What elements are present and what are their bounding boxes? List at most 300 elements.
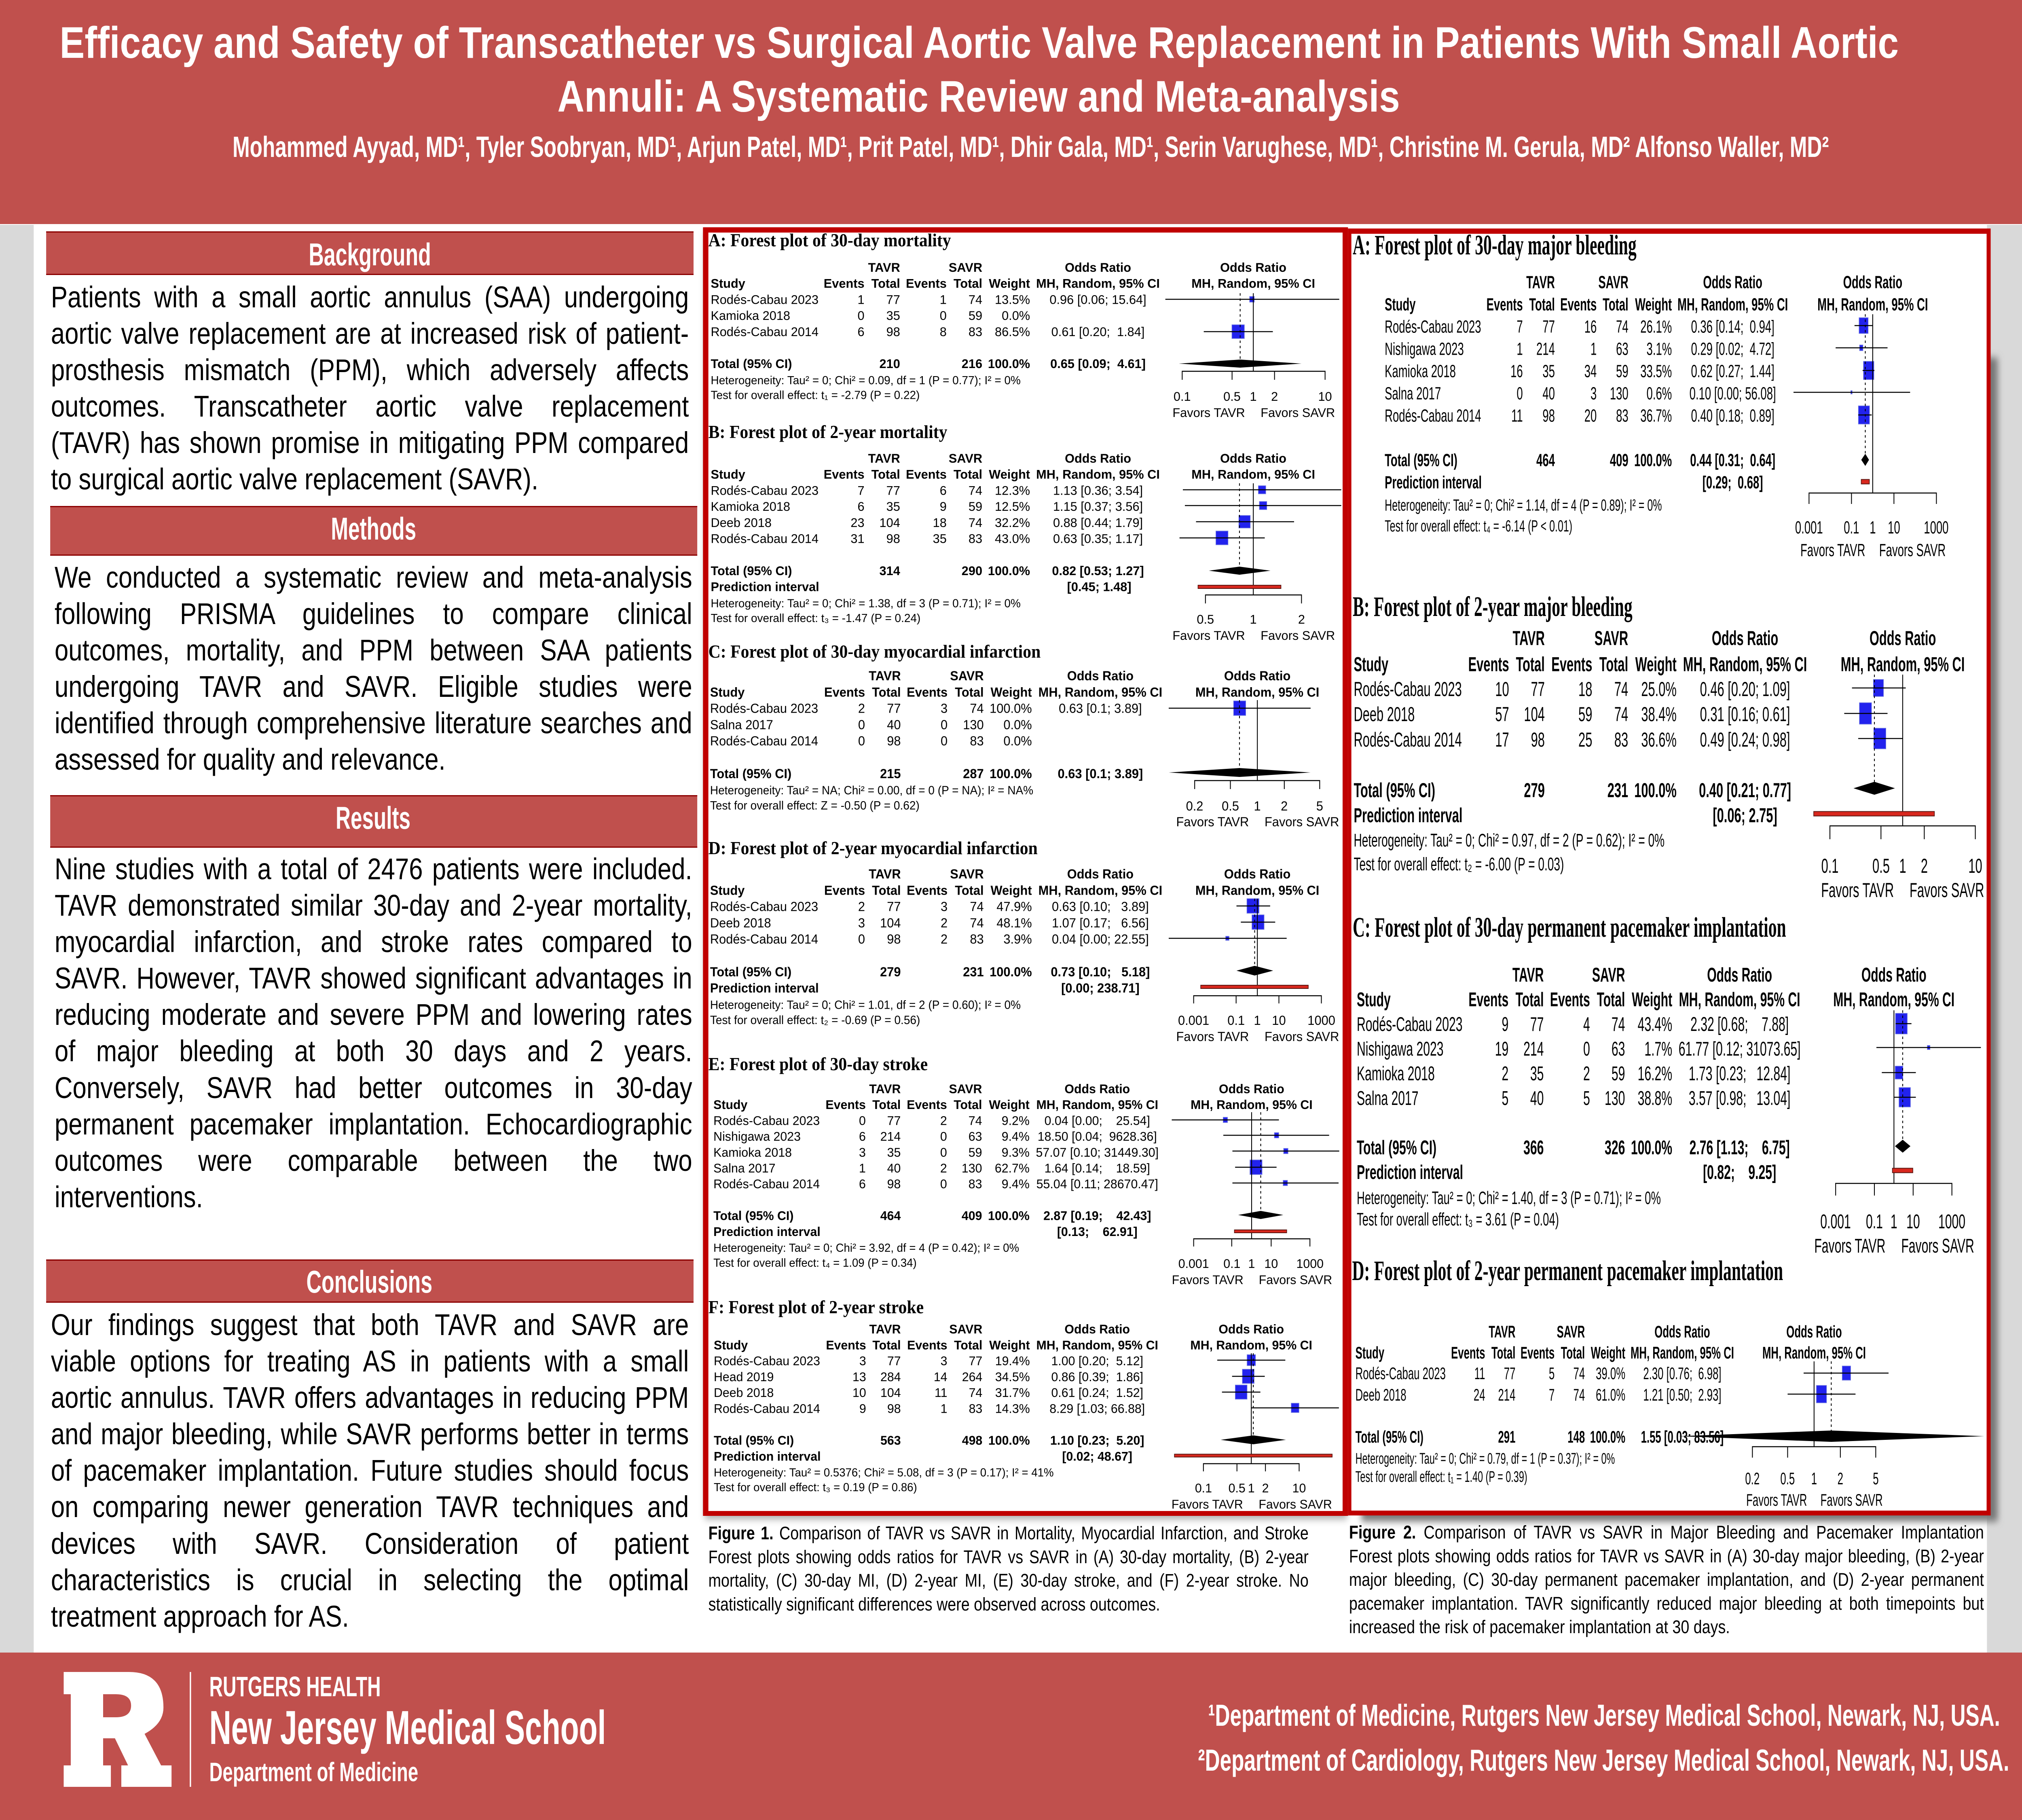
study table: MH, Random, 95% CI [1677,294,1788,314]
study table: 104 [880,515,900,530]
study table: Rodés-Cabau 2014 [710,734,818,748]
study table: 36.7% [1640,406,1672,425]
study table: 13 [852,1369,866,1384]
study table: 2 [940,1161,947,1175]
study table: 35 [886,309,900,323]
study table: Odds Ratio [1712,627,1778,650]
study table: 77 [887,899,901,914]
study table: MH, Random, 95% CI [1191,276,1315,291]
forest plot 2C: 30-day permanent pacemaker implantation [1353,912,1981,1257]
study table: Kamioka 2018 [711,309,790,323]
study table: 74 [969,483,982,498]
study table: 0.0% [1003,734,1032,748]
study table: 2 [1921,855,1928,877]
study table: 25.0% [1641,678,1677,700]
study table: 77 [1504,1365,1515,1383]
study table: Kamioka 2018 [713,1145,792,1160]
study table: Rodés-Cabau 2014 [711,324,819,339]
logo wordmark: Department of Medicine [209,1757,418,1787]
study table: 74 [970,899,984,914]
study table: 0 [1516,383,1523,403]
study table: 31.7% [995,1386,1030,1400]
forest graphic [1678,1361,1984,1458]
study table: MH, Random, 95% CI [1762,1344,1866,1363]
study table: MH, Random, 95% CI [1036,276,1160,291]
study table: Rodés-Cabau 2023 [1385,317,1481,336]
study table: Total [955,685,984,699]
study table: Favors TAVR [1172,1497,1243,1511]
forest graphic [1172,1112,1339,1246]
study table: Rodés-Cabau 2023 [1354,678,1462,700]
study table: 2.87 [0.19; 42.43] [1043,1208,1151,1223]
heading: Conclusions: Conclusions [307,1264,432,1299]
study table: 2 [1262,1481,1269,1495]
study table: 214 [1523,1037,1544,1060]
study table: Rodés-Cabau 2023 [710,701,818,716]
study table: 0.5 [1223,389,1241,404]
study table: Heterogeneity: Tau² = 0; Chi² = 0.79, df = 1 (P = 0.37); I² = 0% [1356,1450,1615,1467]
plot title: B: Forest plot of 2-year major bleeding [1353,591,1633,622]
study table: Total (95% CI) [1385,450,1457,470]
study table: 1 [1591,339,1597,359]
study table: 2.76 [1.13; 6.75] [1690,1136,1790,1159]
study table: 0 [940,1177,947,1191]
text block: conclusions: treatment approach for AS. [51,1600,349,1633]
study table: Total [1529,294,1555,314]
study table: 2 [858,701,865,716]
study table: Events [1487,294,1523,314]
logo wordmark [209,1671,606,1787]
study table: 36.6% [1641,729,1677,751]
study table: 4 [1583,1013,1590,1035]
study table: 0.63 [0.1; 3.89] [1058,766,1143,781]
study table: 83 [969,1401,982,1416]
study table: Weight [989,1338,1030,1352]
study table: 326 [1605,1136,1625,1159]
study table: 59 [969,1145,982,1160]
study table: Weight [1635,294,1672,314]
study table: Test for overall effect: t₂ = -0.69 (P = 0.56) [710,1014,920,1027]
caption: figure 1: Figure 1. Comparison of TAVR vs SAVR in Mortality, Myocardial Infarction, and Stroke [709,1523,1309,1543]
study table: Odds Ratio [1220,260,1286,275]
study table: 0.36 [0.14; 0.94] [1691,317,1775,336]
study table: 1 [859,1161,866,1175]
study table: Total (95% CI) [711,357,792,371]
study table: 1 [1870,517,1876,537]
study table: Weight [1591,1344,1625,1363]
study table: Total (95% CI) [711,563,792,578]
study table: 210 [880,357,900,371]
study table: Events [906,467,947,482]
study table: 77 [887,1354,901,1368]
study table: 14 [934,1369,948,1384]
study table: 26.1% [1640,317,1672,336]
study table: Test for overall effect: t₃ = 3.61 (P = 0.04) [1357,1209,1559,1230]
study table: Deeb 2018 [711,515,772,530]
plot title: D: Forest plot of 2-year permanent pacemaker implantation [1352,1255,1783,1286]
study table: 77 [886,483,900,498]
study table: 100.0% [990,964,1032,979]
study table: 130 [962,1161,982,1175]
text block: results [55,851,692,1215]
study table [713,1082,1332,1287]
study table: [0.13; 62.91] [1057,1224,1138,1239]
study table: SAVR [950,866,984,881]
study table: 100.0% [1631,1136,1672,1159]
study table: Events [1560,294,1597,314]
text block: methods: identified through comprehensive literature searches and [55,706,692,740]
study table: 214 [1536,339,1555,359]
study table: Study [710,883,745,897]
study table: SAVR [1598,272,1629,292]
study table: 9.3% [1002,1145,1030,1160]
study table: Rodés-Cabau 2014 [710,932,818,946]
study table: Heterogeneity: Tau² = 0; Chi² = 1.01, df = 2 (P = 0.60); I² = 0% [710,999,1021,1012]
study table: Rodés-Cabau 2014 [714,1401,820,1416]
study table: 12.3% [995,483,1030,498]
study table: Odds Ratio [1843,272,1902,292]
study table [1356,1323,1883,1510]
forest graphic [1169,899,1322,1003]
study table: Odds Ratio [1218,1322,1284,1336]
study table: Test for overall effect: t₄ = 1.09 (P = 0.34) [713,1257,917,1269]
study table: 366 [1523,1136,1544,1159]
study table: Favors TAVR [1746,1491,1807,1510]
text block: background: to surgical aortic valve replacement (SAVR). [51,462,538,496]
study table: 74 [1614,678,1628,700]
study table [1357,963,1974,1257]
study table: 8 [940,324,947,339]
study table: Events [1550,988,1590,1011]
study table: Events [824,685,865,699]
study table: Odds Ratio [1220,451,1286,466]
study table: 231 [1607,779,1628,802]
study table: 0.5 [1222,798,1239,813]
study table: 1.00 [0.20; 5.12] [1051,1354,1143,1368]
study table: 98 [886,324,900,339]
study table: 86.5% [995,324,1030,339]
study table: 0.001 [1178,1013,1209,1028]
study table: Total [954,467,982,482]
study table: 10 [1968,855,1982,877]
study table: 0 [857,309,865,323]
text block: background: Patients with a small aortic annulus (SAA) undergoing [51,280,689,314]
study table: 3.1% [1647,339,1672,359]
study table: 0.2 [1745,1470,1760,1488]
study table: 1.55 [0.03; 83.56] [1641,1428,1724,1447]
study table: 98 [887,932,901,946]
forest graphic [1836,1010,1981,1196]
study table: 9 [1502,1013,1508,1035]
study table [711,451,1335,643]
study table: Total [872,883,901,897]
study table: 16 [1510,361,1523,381]
text block: background: outcomes. Transcatheter aortic valve replacement [51,389,689,423]
study table: Deeb 2018 [714,1386,774,1400]
text block: conclusions: characteristics is crucial in selecting the optimal [51,1563,689,1597]
study table: 98 [1531,729,1545,751]
study table: Odds Ratio [1067,866,1134,881]
study table: 100.0% [988,357,1030,371]
study table: MH, Random, 95% CI [1195,883,1319,897]
study table: 130 [1610,383,1629,403]
study table: 0.1 [1223,1257,1240,1271]
study table: 100.0% [988,1433,1030,1448]
study table: 1.10 [0.23; 5.20] [1050,1433,1144,1448]
study table: 7 [857,483,865,498]
plot title: C: Forest plot of 30-day myocardial infarction [709,641,1041,662]
study table: Study [714,1338,748,1352]
forest plot 2B: 2-year major bleeding [1353,591,1984,902]
study table: Total (95% CI) [714,1433,794,1448]
title: Efficacy and Safety of Transcatheter vs Surgical Aortic Valve Replacement in Patients With Small Aortic [60,18,1899,68]
study table: 7 [1549,1386,1555,1405]
study table: Odds Ratio [1861,963,1927,986]
study table: 9 [859,1401,866,1416]
text block: results: outcomes were comparable between the two [55,1144,692,1177]
forest plot 1A: 30-day mortality [709,230,1339,420]
study table: Total [955,883,984,897]
study table: [0.00; 238.71] [1061,980,1140,995]
study table: Heterogeneity: Tau² = 0; Chi² = 1.14, df = 4 (P = 0.89); I² = 0% [1385,497,1662,514]
text block: conclusions: of pacemaker implantation. Future studies should focus [51,1454,689,1487]
study table: Events [1551,653,1592,675]
study table: Total [954,1098,982,1112]
study table: 100.0% [990,766,1032,781]
study table: Kamioka 2018 [1357,1062,1435,1085]
study table: MH, Random, 95% CI [1631,1344,1734,1363]
study table: 314 [880,563,900,578]
study table: 74 [969,1386,982,1400]
text block: results: Nine studies with a total of 2476 patients were included. [55,852,692,886]
study table: 98 [887,734,901,748]
study table: 2 [940,1113,947,1128]
study table: 10 [1265,1257,1278,1271]
study table: 264 [962,1369,982,1384]
study table: 35 [933,531,947,546]
panel: figure 2 frame [1348,229,1998,1522]
study table: Study [1356,1344,1385,1363]
study table: Favors SAVR [1265,1029,1339,1044]
study table: SAVR [950,668,984,683]
study table: SAVR [1557,1323,1585,1342]
study table: 1.21 [0.50; 2.93] [1643,1386,1722,1405]
study table: Total [1603,294,1629,314]
study table: 0.1 [1844,517,1859,537]
study table: 2 [1271,389,1278,404]
plot title: A: Forest plot of 30-day major bleeding [1353,229,1637,260]
title: Annuli: A Systematic Review and Meta-analysis [557,72,1400,121]
study table: Salna 2017 [710,717,773,732]
study table: 563 [880,1433,901,1448]
study table: SAVR [1592,963,1625,986]
study table: 62.7% [995,1161,1030,1175]
study table: 10 [852,1386,866,1400]
study table: 0.001 [1795,517,1823,537]
study table: 74 [970,701,984,716]
study table: 1000 [1307,1013,1335,1028]
caption: figure 2: Forest plots showing odds ratios for TAVR vs SAVR in (A) 30-day major bleeding, (B) 2-year [1349,1546,1984,1566]
study table: Heterogeneity: Tau² = 0; Chi² = 0.09, df = 1 (P = 0.77); I² = 0% [711,374,1021,387]
study table: 83 [969,1177,982,1191]
study table: 3 [859,1354,866,1368]
study table: 0.10 [0.00; 56.08] [1690,383,1776,403]
study table: 63 [1616,339,1629,359]
study table: Study [710,685,745,699]
study table: 104 [880,1386,901,1400]
study table: 77 [969,1354,982,1368]
study table: 279 [880,964,901,979]
study table: 13.5% [995,292,1030,307]
study table: 34 [1584,361,1597,381]
forest plot 2A: 30-day major bleeding [1353,229,1948,560]
study table: Salna 2017 [713,1161,776,1175]
study table: Total (95% CI) [1354,779,1435,802]
study table: 0.31 [0.16; 0.61] [1700,703,1790,726]
study table: MH, Random, 95% CI [1841,653,1965,675]
study table: [0.82; 9.25] [1703,1161,1776,1183]
study table: 59 [969,309,982,323]
study table: TAVR [869,1082,901,1096]
study table: 83 [969,531,982,546]
study table: 57 [1495,703,1509,726]
study table: Favors SAVR [1265,814,1339,829]
study table: 100.0% [1634,450,1672,470]
study table: Test for overall effect: Z = -0.50 (P = 0.62) [710,799,920,813]
study table: 1000 [1297,1257,1324,1271]
study table: 0.63 [0.10; 3.89] [1052,899,1149,914]
study table: Weight [990,685,1032,699]
forest graphic [1165,293,1339,380]
study table: 0.5 [1229,1481,1246,1495]
study table: 130 [963,717,984,732]
study table: 59 [1612,1062,1625,1085]
study table: 1 [1891,1210,1897,1233]
study table: 3 [858,915,865,930]
study table: 59 [1578,703,1592,726]
study table: 59 [1616,361,1629,381]
study table: Total [1491,1344,1515,1363]
study table: 0.62 [0.27; 1.44] [1691,361,1775,381]
study table: Kamioka 2018 [1385,361,1456,381]
study table: 2.32 [0.68; 7.88] [1690,1013,1789,1035]
study table: 0 [940,1145,947,1160]
study table: 74 [1616,317,1629,336]
study table: Events [1451,1344,1485,1363]
study table: 0.1 [1227,1013,1245,1028]
study table: Total [1516,988,1544,1011]
study table: Prediction interval [1357,1161,1463,1183]
study table: Favors TAVR [1172,1273,1244,1287]
study table: 3 [1591,383,1597,403]
study table: 1.07 [0.17; 6.56] [1052,915,1149,930]
study table: Total [871,276,900,291]
study table: 0.1 [1195,1481,1212,1495]
study table: 0.73 [0.10; 5.18] [1051,964,1150,979]
study table: Weight [989,276,1030,291]
study table: Salna 2017 [1357,1087,1419,1109]
study table: 100.0% [988,563,1030,578]
study table [710,866,1339,1044]
study table: 16 [1584,317,1597,336]
study table: TAVR [1489,1323,1515,1342]
study table: Total [872,685,901,699]
study table: Deeb 2018 [1354,703,1415,726]
study table: 0.1 [1174,389,1191,404]
study table: Favors SAVR [1821,1491,1883,1510]
text block: conclusions [51,1307,689,1635]
study table: 19 [1495,1037,1508,1060]
study table: MH, Random, 95% CI [1833,988,1954,1011]
study table: 59 [969,499,982,514]
study table: Events [826,1338,866,1352]
study table: 6 [857,324,865,339]
text block: results: permanent pacemaker implantation. Echocardiographic [55,1107,692,1141]
study table: 98 [887,1177,901,1191]
caption: figure 1: mortality, (C) 30-day MI, (D) 2-year MI, (E) 30-day stroke, and (F) 2-year stroke. No [709,1570,1309,1591]
text block: results: Conversely, SAVR had better outcomes in 30-day [55,1071,692,1105]
study table: Total [1516,653,1545,675]
heading: Results: Results [336,800,410,836]
study table: 100.0% [990,701,1032,716]
study table: 1 [1250,612,1257,626]
study table: Total [1561,1344,1585,1363]
study table [714,1322,1332,1511]
study table: Events [907,883,948,897]
study table: Heterogeneity: Tau² = 0; Chi² = 0.97, df = 2 (P = 0.62); I² = 0% [1354,830,1665,851]
text block: conclusions: aortic annulus. TAVR offers advantages in reducing PPM [51,1381,689,1414]
study table: Odds Ratio [1065,451,1131,466]
study table: SAVR [949,1322,982,1336]
study table: 1000 [1924,517,1948,537]
study table: 35 [886,499,900,514]
study table: TAVR [868,260,900,275]
study table: Total (95% CI) [713,1208,793,1223]
study table: 14.3% [995,1401,1030,1416]
study table: 35 [1530,1062,1544,1085]
study table: 0 [940,309,947,323]
study table: 0.40 [0.18; 0.89] [1691,406,1775,425]
study table: 9.4% [1002,1177,1030,1191]
study table: 40 [1530,1087,1544,1109]
study table: 74 [969,292,982,307]
study table: 1 [1254,1013,1261,1028]
study table: 74 [970,915,984,930]
caption: figure 1: Forest plots showing odds ratios for TAVR vs SAVR in (A) 30-day mortality, (B) 2-year [709,1547,1309,1567]
study table: 2 [858,899,865,914]
study table: Study [713,1098,747,1112]
caption: figure 2: Figure 2. Comparison of TAVR vs SAVR in Major Bleeding and Pacemaker Implantation [1349,1522,1984,1543]
text block: conclusions: viable options for treating AS in patients with a small [51,1344,689,1378]
forest plot 1E: 30-day stroke [709,1054,1339,1287]
study table: 0.1 [1866,1210,1883,1233]
study table: 25 [1578,729,1592,751]
study table: Total [1597,988,1625,1011]
study table: Total [871,467,900,482]
side margins [0,225,2022,1653]
study table: 0.001 [1178,1257,1209,1271]
study table: Favors SAVR [1879,540,1946,560]
study table: 104 [880,915,901,930]
text block: methods: following PRISMA guidelines to compare clinical [55,597,692,631]
study table: 31 [850,531,865,546]
study table: [0.02; 48.67] [1062,1449,1132,1464]
study table: 77 [886,292,900,307]
study table: Events [824,883,865,897]
study table: Odds Ratio [1654,1323,1710,1342]
study table: 1.64 [0.14; 18.59] [1045,1161,1150,1175]
study table: 61.77 [0.12; 31073.65] [1679,1037,1801,1060]
